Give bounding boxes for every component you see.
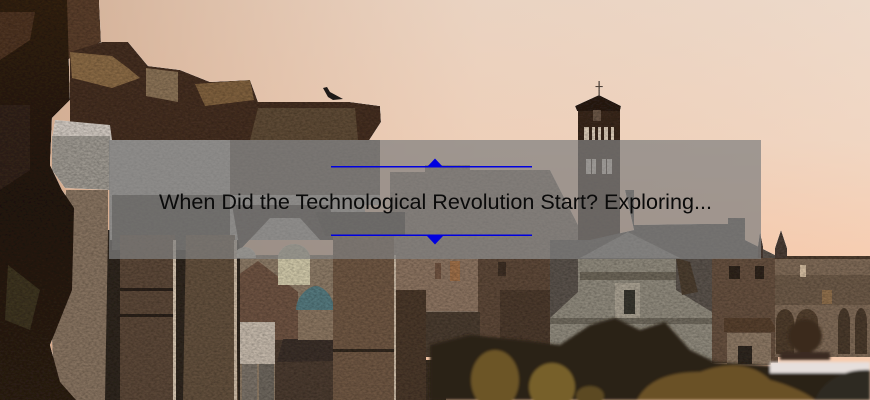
left frieze and cornice: [52, 136, 110, 190]
bottom blue divider with triangle: [331, 234, 532, 244]
column 3: [183, 235, 238, 400]
side building: [712, 258, 778, 365]
column 4: [333, 235, 394, 400]
rear tower stump: [67, 0, 101, 60]
bird on the ledge: [323, 87, 343, 100]
distant city buildings: [235, 81, 870, 400]
top blue divider with triangle: [331, 158, 532, 168]
gaps behind the columns: [105, 230, 240, 400]
near dark wall: [0, 0, 76, 400]
colosseum building: [390, 165, 578, 357]
church with pediment: [550, 190, 775, 362]
foreground ruins: [0, 0, 405, 400]
bell tower: [575, 81, 621, 243]
column capitals and frieze band: [110, 140, 380, 240]
right arcade ruin: [758, 230, 870, 357]
translucent title band: [109, 140, 761, 259]
column 2: [120, 235, 175, 400]
temple entablature: [52, 42, 381, 142]
dark tree line: [430, 318, 870, 400]
low left buildings and dome: [235, 255, 446, 400]
title text: When Did the Technological Revolution Start? Exploring...: [159, 191, 712, 214]
column 1: [52, 190, 108, 400]
